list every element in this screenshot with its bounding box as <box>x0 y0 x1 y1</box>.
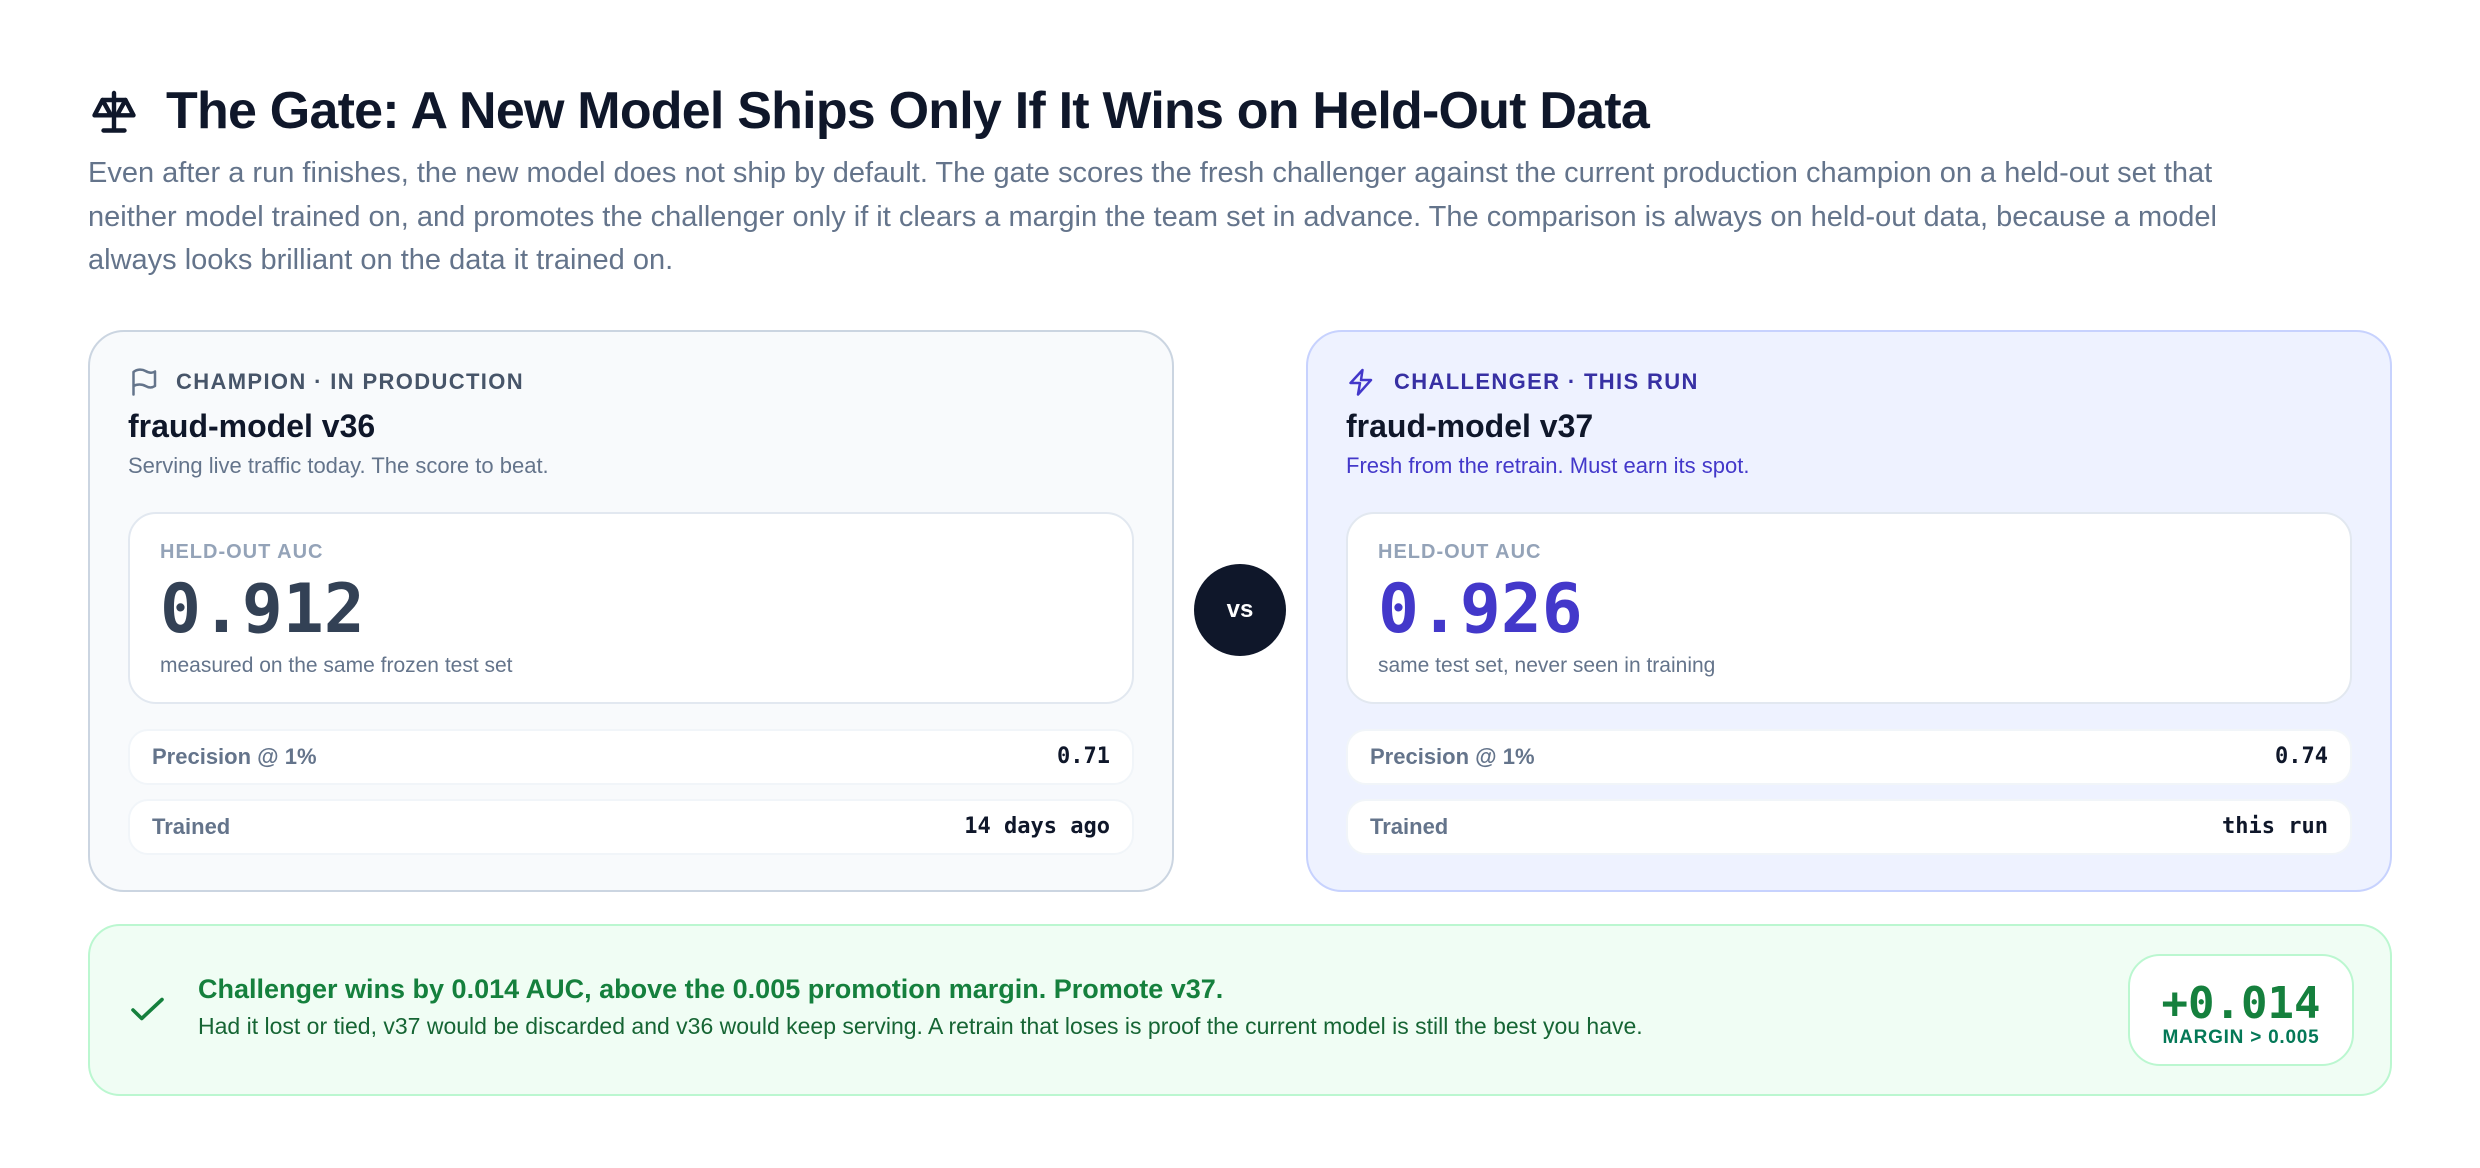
vs badge: vs <box>1227 596 1253 623</box>
margin threshold: MARGIN > 0.005 <box>2163 1027 2319 1048</box>
AUC label: HELD-OUT AUC <box>1378 541 1541 563</box>
challenger model name: fraud-model v37 <box>1346 408 1593 444</box>
icon: flag <box>132 368 156 396</box>
champion label: CHAMPION · IN PRODUCTION <box>176 369 524 394</box>
vs badge <box>1194 564 1286 656</box>
challenger AUC box <box>1346 512 2352 704</box>
trained label: Trained <box>1370 814 1448 839</box>
precision label: Precision @ 1% <box>152 744 317 769</box>
champion description: Serving live traffic today. The score to beat. <box>128 453 549 478</box>
AUC note: same test set, never seen in training <box>1378 654 1715 677</box>
icon: check mark <box>131 998 164 1020</box>
AUC note: measured on the same frozen test set <box>160 654 513 677</box>
icon: lightning bolt <box>1349 368 1372 396</box>
trained label: Trained <box>152 814 230 839</box>
AUC label: HELD-OUT AUC <box>160 541 323 563</box>
verdict banner <box>88 924 2392 1096</box>
precision row <box>1346 729 2352 785</box>
trained value: 14 days ago <box>964 814 1110 839</box>
precision value: 0.71 <box>1057 744 1110 769</box>
margin value: +0.014 <box>2162 978 2320 1029</box>
intro paragraph <box>88 157 2217 276</box>
precision row <box>128 729 1134 785</box>
challenger label: CHALLENGER · THIS RUN <box>1394 369 1699 394</box>
panel: champion <box>88 330 1174 892</box>
verdict explanation: Had it lost or tied, v37 would be discarded and v36 would keep serving. A retrain that loses is proof the current model is still the best you have. <box>198 1013 1643 1039</box>
challenger description: Fresh from the retrain. Must earn its spot. <box>1346 453 1749 478</box>
trained value: this run <box>2222 814 2328 839</box>
title: The Gate: A New Model Ships Only If It Wins on Held-Out Data <box>166 82 1649 140</box>
champion AUC box <box>128 512 1134 704</box>
intro paragraph: Even after a run finishes, the new model does not ship by default. The gate scores the fresh challenger against the current production champion on a held-out set that <box>88 157 2212 189</box>
champion model name: fraud-model v36 <box>128 408 375 444</box>
icon: balance scale <box>92 90 136 133</box>
precision value: 0.74 <box>2275 744 2328 769</box>
intro paragraph: neither model trained on, and promotes the challenger only if it clears a margin the team set in advance. The comparison is always on held-out data, because a model <box>88 200 2217 232</box>
margin callout <box>2128 954 2354 1066</box>
trained row <box>128 799 1134 855</box>
precision label: Precision @ 1% <box>1370 744 1535 769</box>
trained row <box>1346 799 2352 855</box>
AUC value: 0.926 <box>1378 570 1583 649</box>
intro paragraph: always looks brilliant on the data it trained on. <box>88 244 673 276</box>
panel: challenger <box>1306 330 2392 892</box>
verdict headline: Challenger wins by 0.014 AUC, above the 0.005 promotion margin. Promote v37. <box>198 974 1223 1004</box>
AUC value: 0.912 <box>160 570 365 649</box>
